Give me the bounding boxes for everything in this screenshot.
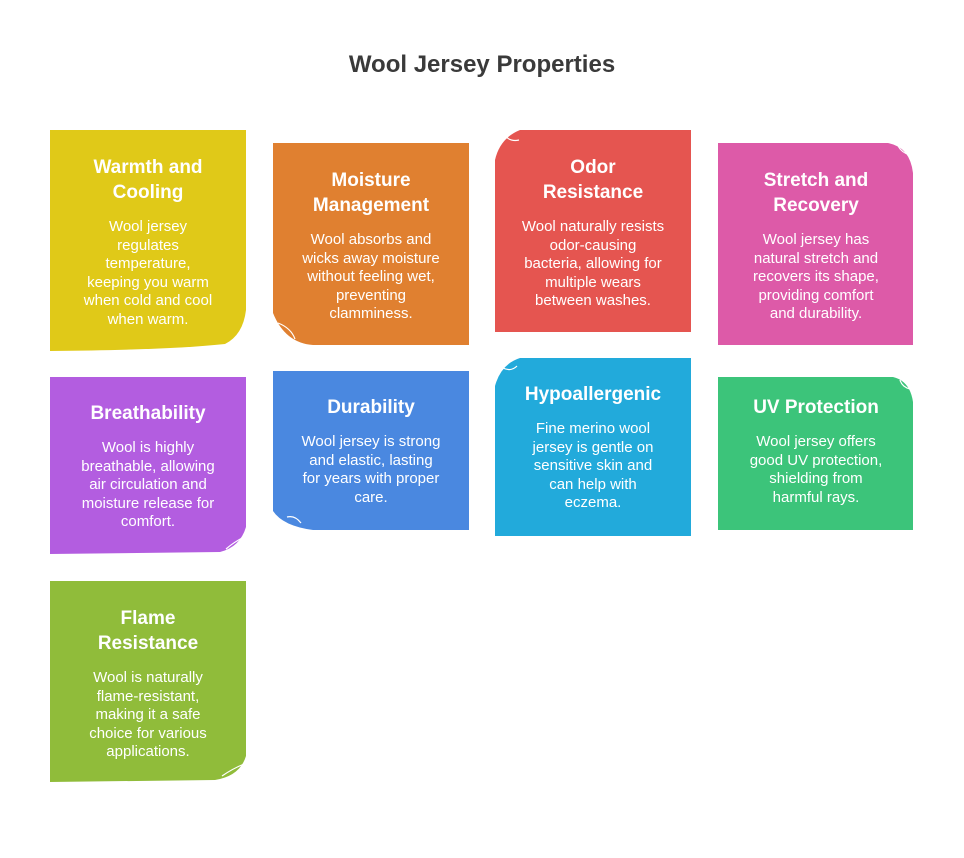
card: uv protection: harmful rays. bbox=[773, 489, 859, 506]
card: moisture management bbox=[273, 143, 469, 345]
card: flame resistance: making it a safe bbox=[95, 706, 201, 723]
card: odor resistance: bacteria, allowing for bbox=[524, 255, 662, 272]
card: warmth and cooling: temperature, bbox=[105, 255, 191, 272]
card: moisture management: Moisture bbox=[331, 170, 411, 191]
card: uv protection: Wool jersey offers bbox=[756, 433, 876, 450]
card: flame resistance bbox=[50, 581, 246, 782]
card: breathability: moisture release for bbox=[82, 495, 214, 512]
card: durability: and elastic, lasting bbox=[309, 452, 433, 469]
card: flame resistance: Wool is naturally bbox=[93, 669, 203, 686]
card: warmth and cooling: Cooling bbox=[113, 182, 183, 203]
card: breathability bbox=[50, 377, 246, 554]
card: warmth and cooling bbox=[50, 130, 246, 351]
card: warmth and cooling: keeping you warm bbox=[87, 274, 209, 291]
card: warmth and cooling: Wool jersey bbox=[109, 218, 187, 235]
card: moisture management: wicks away moisture bbox=[302, 250, 440, 267]
card: moisture management: preventing bbox=[336, 287, 406, 304]
card: uv protection: UV Protection bbox=[753, 397, 879, 418]
card: durability: care. bbox=[354, 489, 388, 506]
card: hypoallergenic: eczema. bbox=[565, 494, 621, 511]
card: warmth and cooling: when cold and cool bbox=[84, 292, 212, 309]
card: hypoallergenic bbox=[495, 358, 691, 536]
card: breathability: Breathability bbox=[90, 403, 206, 424]
card: odor resistance: Odor bbox=[570, 157, 616, 178]
card: hypoallergenic: sensitive skin and bbox=[534, 457, 652, 474]
card: odor resistance: Wool naturally resists bbox=[522, 218, 664, 235]
card: hypoallergenic: Fine merino wool bbox=[536, 420, 650, 437]
card: odor resistance: odor-causing bbox=[550, 237, 636, 254]
card: stretch and recovery: Stretch and bbox=[764, 170, 868, 191]
card: stretch and recovery bbox=[718, 143, 913, 345]
card: durability bbox=[273, 371, 469, 530]
title: Wool Jersey Properties bbox=[349, 51, 615, 78]
card: flame resistance: Flame bbox=[121, 608, 175, 629]
card: moisture management: Management bbox=[313, 195, 429, 216]
card: breathability: air circulation and bbox=[89, 476, 207, 493]
card: hypoallergenic: can help with bbox=[549, 476, 637, 493]
card: breathability: breathable, allowing bbox=[81, 458, 215, 475]
card: odor resistance: Resistance bbox=[543, 182, 643, 203]
card: stretch and recovery: providing comfort bbox=[758, 287, 874, 304]
card: uv protection bbox=[718, 377, 913, 530]
card: flame resistance: choice for various bbox=[89, 725, 207, 742]
card: uv protection: shielding from bbox=[769, 470, 863, 487]
card: uv protection: good UV protection, bbox=[750, 452, 882, 469]
card: moisture management: without feeling wet, bbox=[307, 268, 435, 285]
card: hypoallergenic: jersey is gentle on bbox=[533, 439, 653, 456]
card: moisture management: clamminess. bbox=[329, 305, 413, 322]
card: warmth and cooling: Warmth and bbox=[93, 157, 203, 178]
card: warmth and cooling: when warm. bbox=[108, 311, 188, 328]
card: flame resistance: Resistance bbox=[98, 633, 198, 654]
card: warmth and cooling: regulates bbox=[117, 237, 179, 254]
card: durability: for years with proper bbox=[303, 470, 439, 487]
card: odor resistance: multiple wears bbox=[545, 274, 641, 291]
card: durability: Wool jersey is strong bbox=[302, 433, 440, 450]
card: stretch and recovery: natural stretch and bbox=[754, 250, 878, 267]
card: flame resistance: applications. bbox=[106, 743, 190, 760]
card: odor resistance bbox=[495, 130, 691, 332]
card: stretch and recovery: and durability. bbox=[770, 305, 862, 322]
card: stretch and recovery: Recovery bbox=[773, 195, 859, 216]
card: moisture management: Wool absorbs and bbox=[311, 231, 431, 248]
card: stretch and recovery: recovers its shape, bbox=[753, 268, 879, 285]
card: durability: Durability bbox=[327, 397, 415, 418]
card: breathability: comfort. bbox=[121, 513, 175, 530]
card: odor resistance: between washes. bbox=[535, 292, 651, 309]
card: flame resistance: flame-resistant, bbox=[97, 688, 199, 705]
card: stretch and recovery: Wool jersey has bbox=[763, 231, 869, 248]
card: breathability: Wool is highly bbox=[102, 439, 194, 456]
card: hypoallergenic: Hypoallergenic bbox=[525, 384, 661, 405]
